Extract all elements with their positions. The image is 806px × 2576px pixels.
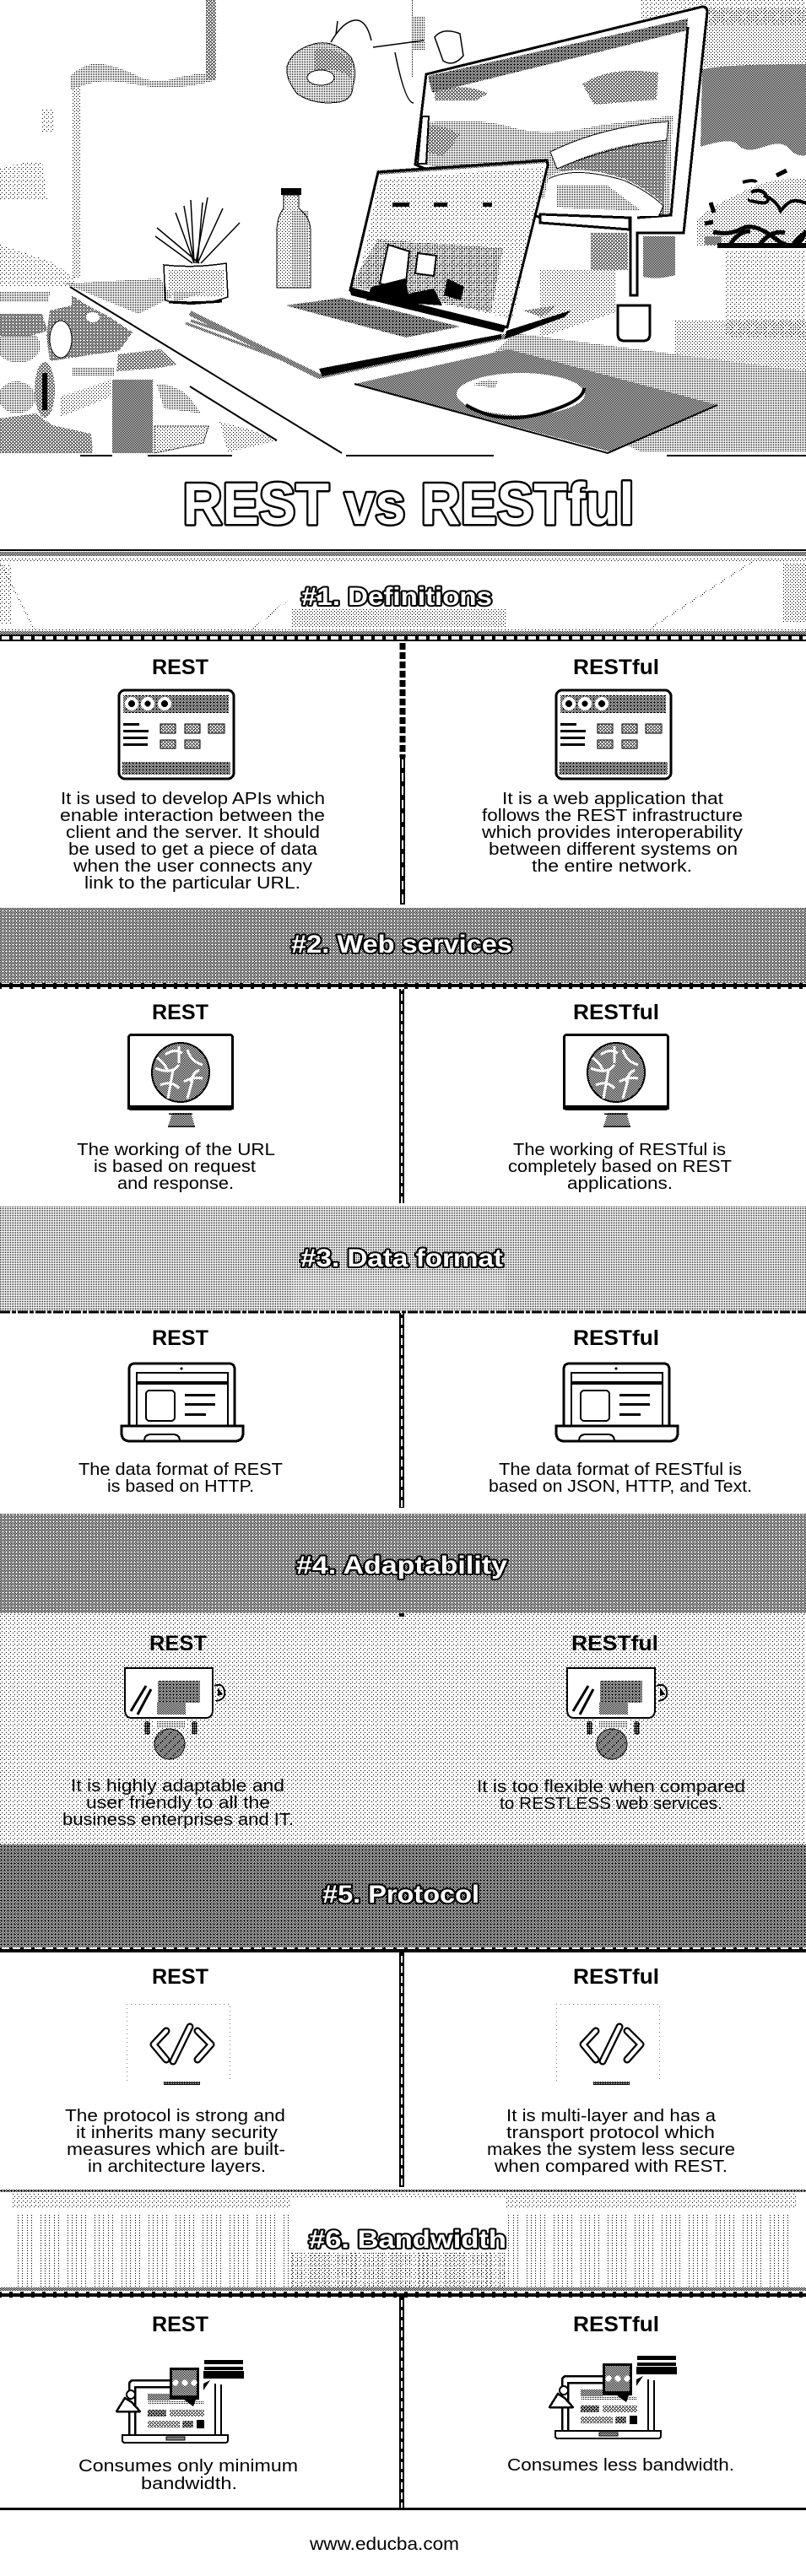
bush right bbox=[696, 170, 806, 248]
RESTful protocol column bbox=[487, 1965, 735, 2176]
panel: protocol bbox=[65, 1952, 735, 2187]
REST web services column: is based on request bbox=[94, 1158, 256, 1176]
title: REST vs RESTful bbox=[182, 471, 635, 537]
REST protocol column: REST bbox=[152, 1965, 208, 1989]
banner: #4 Adaptability bbox=[0, 1514, 806, 1613]
footer url: www.educba.com bbox=[309, 2535, 459, 2554]
RESTful bandwidth column: Consumes less bandwidth. bbox=[507, 2456, 734, 2475]
banner: #5 Protocol: #5. Protocol bbox=[322, 1881, 479, 1909]
RESTful protocol column: transport protocol which bbox=[506, 2124, 715, 2142]
divider bbox=[399, 1313, 406, 1508]
hero photo: desk with laptop, monitor, lamp and plant bbox=[0, 0, 806, 456]
RESTful definition column: which provides interoperability bbox=[481, 824, 743, 842]
bottom rule bbox=[0, 2508, 806, 2510]
divider bbox=[399, 989, 406, 1203]
REST bandwidth column: bandwidth. bbox=[141, 2475, 237, 2493]
REST protocol column bbox=[65, 1965, 285, 2176]
REST data format column: REST bbox=[152, 1326, 208, 1350]
hero bottom edge marks bbox=[80, 455, 806, 456]
RESTful adaptability column: to RESTLESS web services. bbox=[500, 1795, 722, 1813]
banner: #1 Definitions: #1. Definitions bbox=[301, 583, 492, 611]
divider bbox=[398, 2297, 405, 2508]
RESTful definition column: It is a web application that bbox=[502, 790, 724, 808]
RESTful definition column: the entire network. bbox=[532, 857, 692, 876]
banner: #2 Web services bbox=[0, 908, 806, 989]
banner: #2 Web services: #2. Web services bbox=[291, 931, 512, 959]
bottle bbox=[277, 188, 311, 288]
REST web services column: REST bbox=[152, 1001, 208, 1024]
REST definition column: It is used to develop APIs which bbox=[61, 790, 325, 808]
RESTful protocol column: It is multi-layer and has a bbox=[506, 2107, 717, 2125]
RESTful web services column: applications. bbox=[567, 1175, 673, 1193]
plant in pot bbox=[155, 197, 240, 304]
panel: bandwidth bbox=[78, 2297, 734, 2508]
REST bandwidth column: Consumes only minimum bbox=[78, 2457, 298, 2476]
REST adaptability column: user friendly to all the bbox=[86, 1794, 270, 1812]
REST definition column: client and the server. It should bbox=[66, 824, 320, 842]
lamp bbox=[287, 20, 463, 103]
RESTful definition column: between different systems on bbox=[489, 840, 738, 859]
REST adaptability column: It is highly adaptable and bbox=[71, 1777, 284, 1796]
mousepad and mouse bbox=[354, 349, 717, 453]
REST definition column: link to the particular URL. bbox=[84, 874, 300, 893]
REST definition column: enable interaction between the bbox=[60, 807, 325, 825]
RESTful bandwidth column: RESTful bbox=[573, 2313, 659, 2336]
panel: data format bbox=[78, 1313, 752, 1508]
RESTful data format column: RESTful bbox=[573, 1326, 659, 1350]
RESTful definition column: follows the REST infrastructure bbox=[482, 807, 743, 825]
RESTful definition column: RESTful bbox=[573, 656, 659, 679]
RESTful web services column bbox=[508, 1001, 732, 1193]
RESTful data format column bbox=[489, 1326, 752, 1496]
banner: #6 Bandwidth bbox=[0, 2190, 806, 2298]
REST data format column: The data format of REST bbox=[78, 1461, 283, 1479]
REST web services column: and response. bbox=[117, 1175, 234, 1193]
REST definition column: when the user connects any bbox=[73, 857, 312, 876]
REST web services column bbox=[77, 1001, 275, 1193]
RESTful adaptability column bbox=[477, 1632, 745, 1813]
REST bandwidth column: REST bbox=[152, 2313, 208, 2336]
RESTful data format column: based on JSON, HTTP, and Text. bbox=[489, 1477, 752, 1496]
desk surface and lower-left reflections bbox=[0, 270, 806, 453]
REST bandwidth column bbox=[78, 2313, 298, 2493]
banner: #3 Data format: #3. Data format bbox=[300, 1245, 503, 1272]
RESTful web services column: The working of RESTful is bbox=[513, 1141, 726, 1159]
laptop bbox=[190, 159, 571, 377]
RESTful definition column bbox=[481, 656, 743, 876]
REST data format column bbox=[78, 1326, 283, 1496]
REST web services column: The working of the URL bbox=[77, 1141, 275, 1159]
banner: #6 Bandwidth: #6. Bandwidth bbox=[309, 2226, 506, 2254]
REST protocol column: The protocol is strong and bbox=[65, 2107, 285, 2125]
monitor bbox=[415, 7, 707, 341]
RESTful bandwidth column bbox=[507, 2313, 734, 2475]
REST definition column bbox=[60, 656, 325, 893]
banner: #5 Protocol bbox=[0, 1844, 806, 1952]
REST protocol column: measures which are built- bbox=[67, 2141, 285, 2159]
RESTful web services column: RESTful bbox=[573, 1001, 659, 1024]
RESTful protocol column: RESTful bbox=[573, 1965, 659, 1989]
REST definition column: REST bbox=[152, 656, 208, 679]
RESTful adaptability column: It is too flexible when compared bbox=[477, 1778, 745, 1796]
RESTful protocol column: when compared with REST. bbox=[494, 2157, 728, 2176]
RESTful protocol column: makes the system less secure bbox=[487, 2141, 735, 2159]
RESTful web services column: completely based on REST bbox=[508, 1158, 732, 1176]
REST definition column: be used to get a piece of data bbox=[68, 840, 318, 859]
REST adaptability column bbox=[62, 1632, 294, 1829]
RESTful data format column: The data format of RESTful is bbox=[499, 1461, 742, 1479]
banner: #3 Data format bbox=[0, 1207, 806, 1312]
divider bbox=[398, 1952, 405, 2187]
panel: definitions bbox=[60, 643, 743, 905]
REST adaptability column: REST bbox=[149, 1632, 207, 1655]
REST adaptability column: business enterprises and IT. bbox=[62, 1811, 294, 1829]
REST data format column: is based on HTTP. bbox=[107, 1477, 254, 1496]
RESTful adaptability column: RESTful bbox=[571, 1632, 658, 1655]
divider bbox=[400, 643, 405, 758]
wall shading right bbox=[591, 0, 806, 338]
curtain shadow left bbox=[0, 0, 425, 287]
panel: web services bbox=[77, 989, 732, 1203]
banner: #4 Adaptability: #4. Adaptability bbox=[296, 1552, 507, 1580]
banner: #1 Definitions bbox=[0, 549, 806, 641]
panel: adaptability bbox=[0, 1613, 806, 1844]
REST protocol column: in architecture layers. bbox=[88, 2157, 266, 2176]
REST protocol column: it inherits many security bbox=[76, 2124, 278, 2142]
